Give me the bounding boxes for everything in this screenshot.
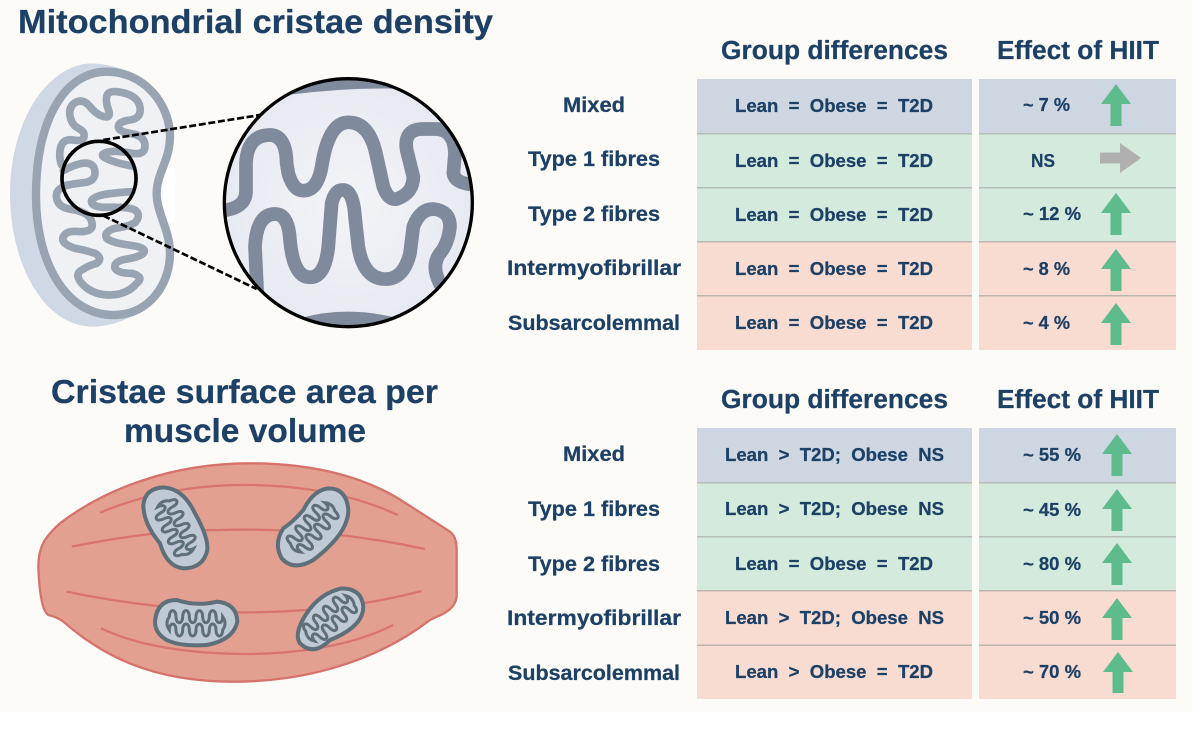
mitochondrion top right	[278, 488, 348, 565]
table: density group differences and HIIT effect	[507, 37, 1176, 350]
row: type 2 fibres: Lean = Obese = T2D	[735, 553, 933, 574]
title: cristae surface area per muscle volume: Cristae surface area per	[51, 373, 438, 410]
row: subsarcolemmal: ~ 70 %	[1023, 661, 1081, 682]
row: subsarcolemmal: Lean > Obese = T2D	[735, 661, 933, 682]
title: cristae surface area per muscle volume: muscle volume	[124, 412, 366, 449]
row: type 1 fibres: NS	[1031, 150, 1055, 171]
row: subsarcolemmal	[508, 295, 1176, 350]
illustration: mitochondrion with magnified cristae	[10, 63, 477, 333]
row: type 2 fibres: Type 2 fibres	[528, 553, 660, 576]
mitochondrion top left	[143, 487, 207, 568]
mitochondrion bottom right	[298, 588, 363, 649]
row: mixed: Lean > T2D; Obese NS	[725, 444, 944, 465]
row: intermyofibrillar: Intermyofibrillar	[507, 257, 681, 280]
row: type 2 fibres	[528, 187, 1176, 242]
row: mixed: ~ 55 %	[1023, 444, 1081, 465]
row: intermyofibrillar: Lean > T2D; Obese NS	[725, 607, 944, 628]
row: mixed: ~ 7 %	[1023, 94, 1070, 115]
row: subsarcolemmal: Subsarcolemmal	[508, 662, 680, 685]
row: type 1 fibres: Lean > T2D; Obese NS	[725, 498, 944, 519]
row: type 1 fibres: Type 1 fibres	[528, 498, 660, 521]
row: mixed	[563, 79, 1176, 133]
mitochondrion body	[10, 63, 175, 327]
zoom indicator circle and dashed lines	[62, 115, 260, 289]
row: type 1 fibres	[528, 133, 1176, 188]
row: type 2 fibres: Lean = Obese = T2D	[735, 204, 933, 225]
table: surface area group differences and HIIT effect	[507, 386, 1176, 699]
row: type 1 fibres: ~ 45 %	[1023, 499, 1081, 520]
row: subsarcolemmal: Lean = Obese = T2D	[735, 312, 933, 333]
muscle belly	[38, 463, 457, 682]
row: type 1 fibres	[528, 482, 1176, 537]
heading: group differences: Group differences	[721, 37, 948, 65]
row: intermyofibrillar: Lean = Obese = T2D	[735, 258, 933, 279]
row: type 1 fibres: Type 1 fibres	[528, 148, 660, 171]
heading: effect of HIIT: Effect of HIIT	[997, 37, 1159, 65]
muscle fibre lines	[67, 485, 425, 654]
row: mixed: Lean = Obese = T2D	[735, 95, 933, 116]
row: intermyofibrillar	[507, 590, 1176, 645]
row: intermyofibrillar	[507, 241, 1176, 296]
row: mixed	[563, 428, 1176, 482]
heading: effect of HIIT: Effect of HIIT	[997, 386, 1159, 414]
mitochondrion bottom left	[155, 600, 237, 645]
heading: group differences: Group differences	[721, 386, 948, 414]
row: intermyofibrillar: ~ 8 %	[1023, 258, 1070, 279]
row: intermyofibrillar: ~ 50 %	[1023, 607, 1081, 628]
row: subsarcolemmal: Subsarcolemmal	[508, 312, 680, 335]
row: subsarcolemmal	[508, 644, 1176, 699]
row: type 2 fibres: ~ 80 %	[1023, 553, 1081, 574]
magnified cristae lens	[222, 70, 477, 333]
title: mitochondrial cristae density: Mitochondrial cristae density	[18, 3, 494, 40]
row: type 2 fibres: Type 2 fibres	[528, 203, 660, 226]
row: type 1 fibres: Lean = Obese = T2D	[735, 150, 933, 171]
row: intermyofibrillar: Intermyofibrillar	[507, 607, 681, 630]
illustration: muscle with mitochondria	[38, 463, 457, 682]
row: type 2 fibres: ~ 12 %	[1023, 203, 1081, 224]
row: mixed: Mixed	[563, 94, 625, 117]
row: type 2 fibres	[528, 536, 1176, 591]
row: subsarcolemmal: ~ 4 %	[1023, 312, 1070, 333]
title: cristae surface area per muscle volume	[51, 373, 438, 449]
row: mixed: Mixed	[563, 443, 625, 466]
